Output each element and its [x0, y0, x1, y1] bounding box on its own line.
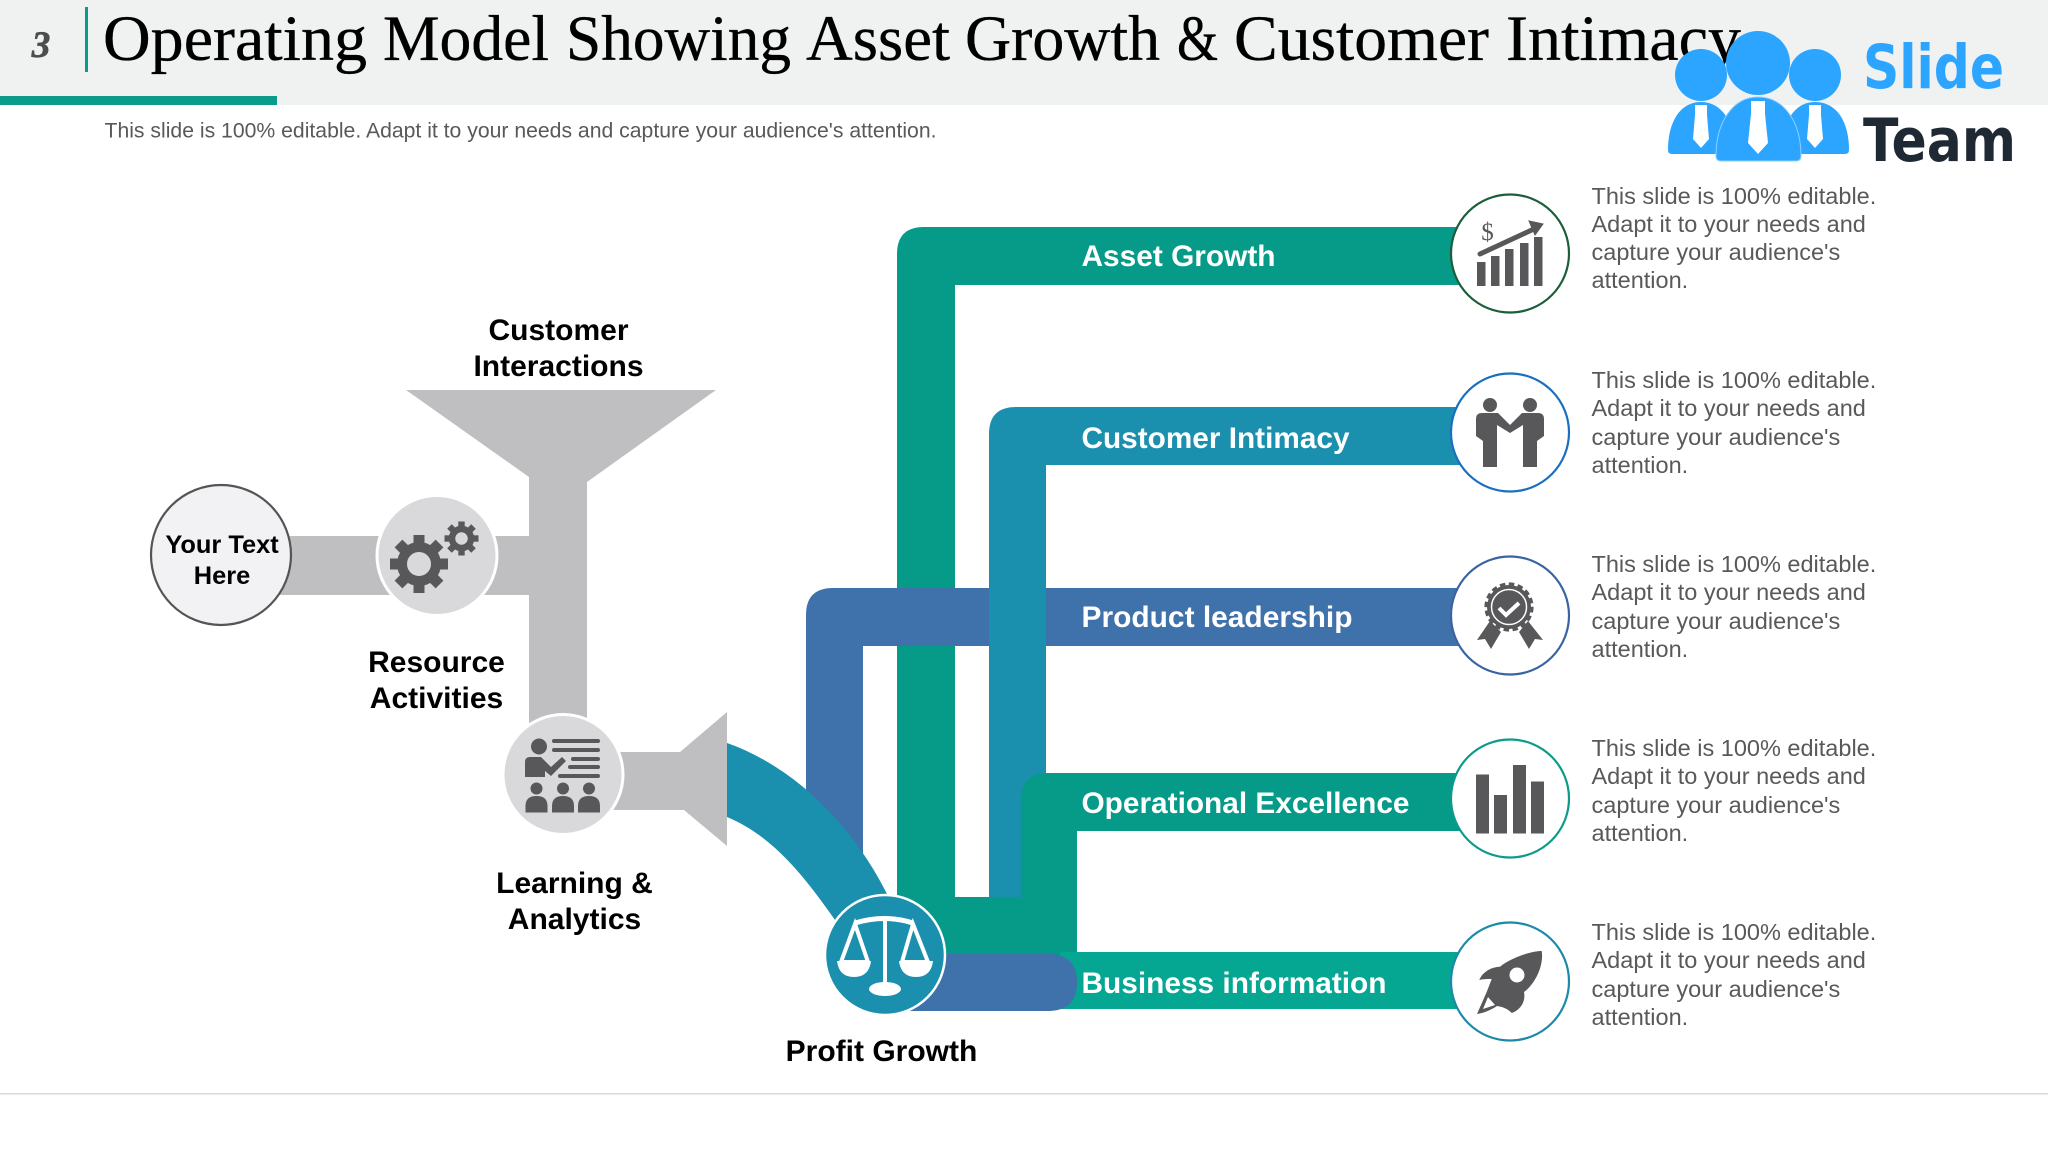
icon circle: asset growth chart: $: [1481, 219, 1494, 246]
description: customer intimacy: This slide is 100% editable.: [1592, 367, 1876, 393]
icon circle: gears: [377, 496, 497, 616]
grey funnel and connectors: [270, 390, 727, 846]
stream: asset growth: [897, 227, 1510, 960]
description: product leadership: Adapt it to your needs and: [1592, 579, 1866, 605]
label: learning and analytics: [496, 867, 653, 936]
description: customer intimacy: [1592, 367, 1876, 478]
description: customer intimacy: Adapt it to your needs and: [1592, 395, 1866, 421]
label: customer interactions: Interactions: [473, 350, 644, 383]
stream: operational excellence: [897, 773, 1510, 1000]
label: customer interactions: [473, 314, 644, 383]
large gear: [390, 535, 448, 593]
description: product leadership: This slide is 100% editable.: [1592, 551, 1876, 577]
stream labels: Operational Excellence: [1082, 787, 1410, 820]
stream labels: [1082, 240, 1410, 1000]
icon circle: customer intimacy handshake: [1451, 374, 1569, 492]
description: asset growth: capture your audience's: [1592, 239, 1840, 265]
description: business information: This slide is 100% editable.: [1592, 919, 1876, 945]
stream: product leadership: [806, 588, 1510, 880]
description: product leadership: [1592, 551, 1876, 662]
description: business information: capture your audience's: [1592, 976, 1840, 1002]
description: operational excellence: [1592, 735, 1876, 846]
label: resource activities: Resource: [368, 646, 505, 679]
description: operational excellence: Adapt it to your needs and: [1592, 763, 1866, 789]
description: product leadership: capture your audience's: [1592, 608, 1840, 634]
icon circle: presentation: [503, 714, 623, 834]
stream labels: Customer Intimacy: [1082, 422, 1350, 455]
title: Intimacy: [1506, 3, 1741, 74]
description: product leadership: attention.: [1592, 636, 1688, 662]
presenter and audience glyph: [525, 738, 600, 812]
stream labels: Product leadership: [1082, 601, 1352, 634]
description: business information: Adapt it to your needs and: [1592, 947, 1866, 973]
balance scale icon: [837, 918, 933, 996]
icon circle: operational excellence bars: [1451, 740, 1569, 858]
label: resource activities: Activities: [370, 682, 503, 715]
label: profit growth: Profit Growth: [786, 1035, 977, 1068]
description: asset growth: attention.: [1592, 267, 1688, 293]
title: Customer: [1234, 3, 1489, 74]
description: customer intimacy: attention.: [1592, 452, 1688, 478]
curved input stream: [727, 743, 887, 920]
description: asset growth: [1592, 183, 1876, 293]
description: business information: attention.: [1592, 1004, 1688, 1030]
description: asset growth: This slide is 100% editable.: [1592, 183, 1876, 209]
circle: your text here: Your Text: [165, 531, 279, 559]
description: business information: [1592, 919, 1876, 1030]
header band: [0, 0, 2048, 105]
icon circle: business information rocket: [1451, 922, 1569, 1040]
title: Model: [383, 3, 549, 74]
label: resource activities: [368, 646, 505, 715]
title: Showing: [566, 3, 791, 74]
small gear: [444, 522, 478, 556]
description: customer intimacy: capture your audience's: [1592, 424, 1840, 450]
label: learning and analytics: Analytics: [508, 903, 641, 936]
logo people icon: [1668, 31, 1849, 161]
subtitle: This slide is 100% editable. Adapt it to your needs and capture your audience's attention.: [104, 120, 936, 142]
label: customer interactions: Customer: [488, 314, 629, 347]
stream labels: Asset Growth: [1082, 240, 1276, 273]
icon circle: asset growth chart: [1451, 194, 1569, 312]
logo wordmark: Slide: [1863, 32, 2004, 103]
circle: profit growth scales: [825, 895, 945, 1015]
SlideTeam logo: [1668, 31, 2016, 176]
title: Operating: [103, 3, 367, 74]
circle: your text here: [151, 485, 291, 625]
description: operational excellence: capture your audience's: [1592, 792, 1840, 818]
description: asset growth: Adapt it to your needs and: [1592, 211, 1866, 237]
slide number: 3: [31, 25, 50, 66]
description: operational excellence: This slide is 100% editable.: [1592, 735, 1876, 761]
stream: business information: [1060, 952, 1510, 1009]
logo wordmark: [1863, 32, 2016, 176]
description: operational excellence: attention.: [1592, 820, 1688, 846]
stream: customer intimacy: [989, 407, 1510, 900]
navy connector pill: [900, 954, 1077, 1011]
circle: your text here: Here: [194, 562, 250, 590]
logo wordmark: Team: [1863, 106, 2016, 176]
stream labels: Business information: [1082, 967, 1386, 1000]
icon circle: product leadership badge: [1451, 556, 1569, 674]
title: &: [1177, 3, 1218, 74]
label: learning and analytics: Learning &: [496, 867, 653, 900]
title: Asset: [806, 3, 950, 74]
title: Growth: [965, 3, 1160, 74]
